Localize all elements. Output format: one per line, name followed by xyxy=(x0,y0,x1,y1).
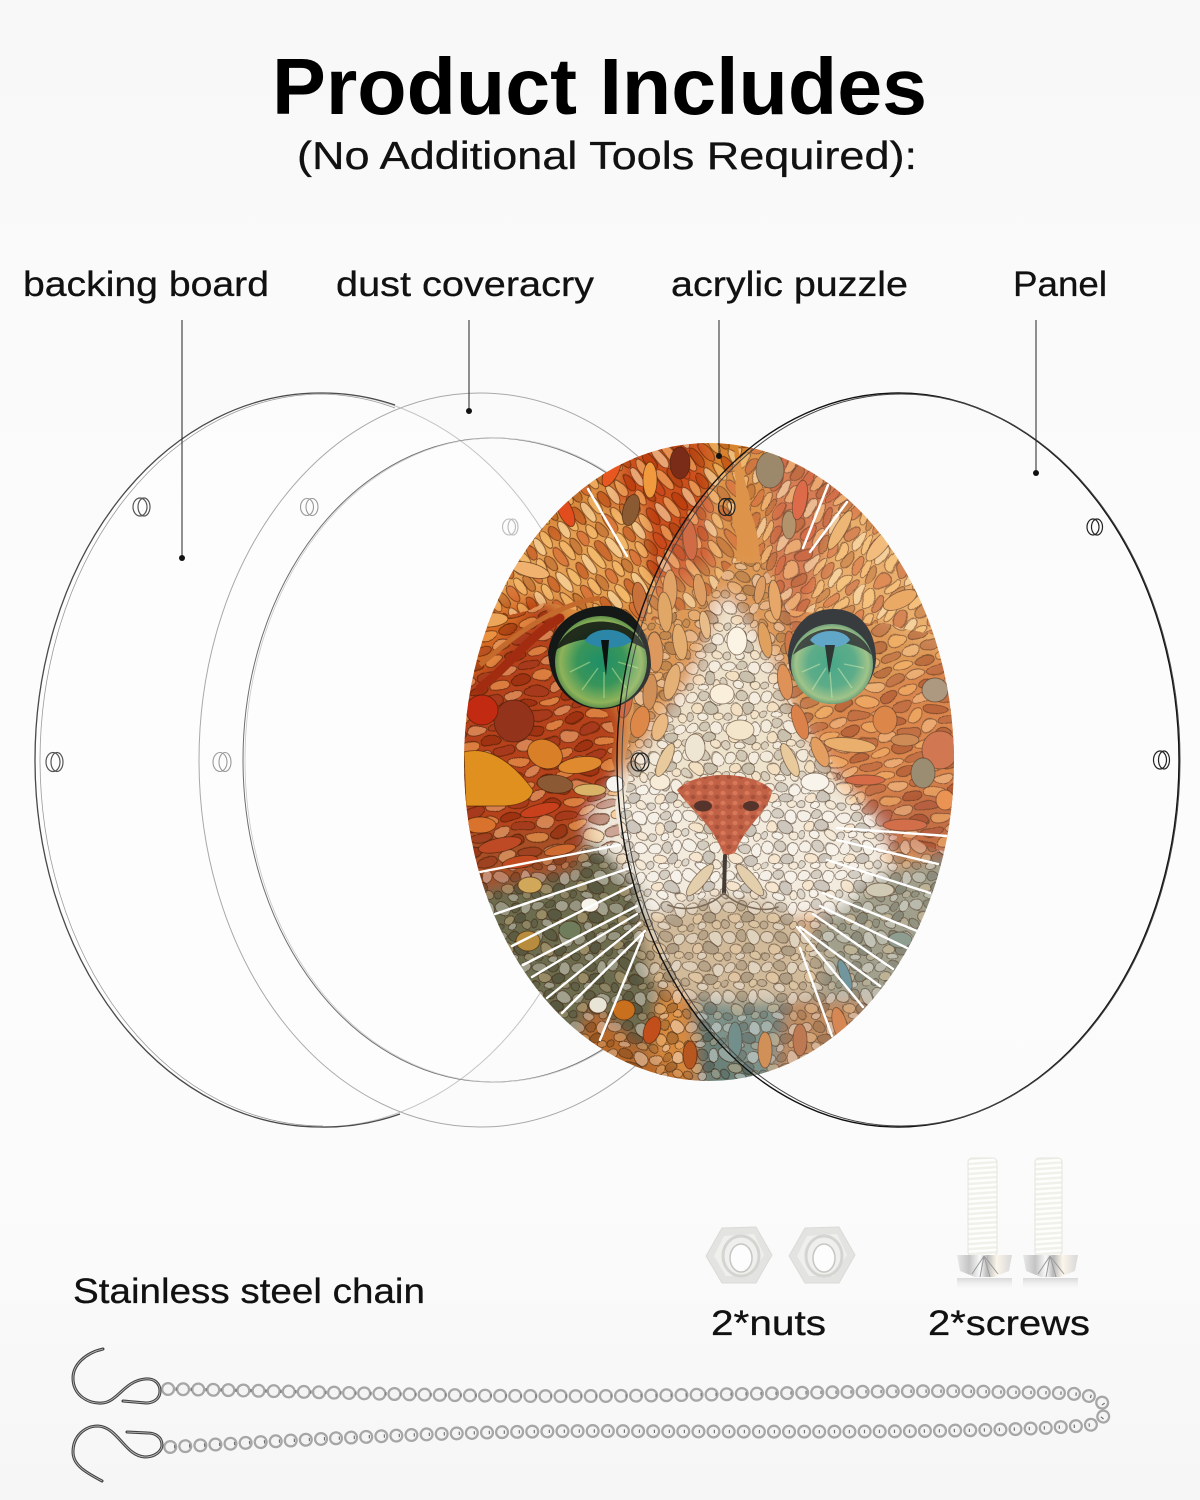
label: backing board: backing board xyxy=(23,265,269,304)
screws xyxy=(957,1158,1078,1289)
label: Panel: Panel xyxy=(1013,265,1107,304)
leader: acrylic puzzle xyxy=(716,320,722,459)
left eye xyxy=(548,606,651,709)
leader: dust cover xyxy=(466,320,472,414)
hook: upper xyxy=(73,1349,160,1403)
label: 2*nuts: 2*nuts xyxy=(711,1304,826,1343)
leader: panel xyxy=(1033,320,1039,476)
dust cover holes xyxy=(213,498,518,772)
chain xyxy=(73,1349,1105,1481)
mouth xyxy=(668,856,778,909)
acrylic puzzle: cat mosaic xyxy=(464,443,954,1081)
label: acrylic puzzle: acrylic puzzle xyxy=(671,265,908,304)
label: dust coveracry: dust coveracry xyxy=(336,265,595,304)
title: Product Includes xyxy=(272,42,927,131)
backing board holes xyxy=(46,498,150,772)
screw 1 xyxy=(957,1158,1012,1289)
leader: backing board xyxy=(179,320,185,561)
dust cover ring xyxy=(199,393,761,1127)
right eye xyxy=(788,609,876,704)
large pebbles xyxy=(464,447,958,1069)
chain links xyxy=(168,1389,1105,1447)
label: 2*screws: 2*screws xyxy=(928,1304,1090,1343)
subtitle: (No Additional Tools Required): xyxy=(297,135,917,178)
hook: lower xyxy=(73,1426,162,1481)
whiskers xyxy=(480,485,947,1040)
dark brow stripes xyxy=(480,618,560,688)
nuts xyxy=(706,1227,855,1283)
panel holes xyxy=(631,498,1170,771)
screw 2 xyxy=(1023,1158,1078,1289)
base colour regions xyxy=(464,443,954,1081)
nose xyxy=(677,775,772,856)
nut 2 xyxy=(789,1227,855,1283)
label: stainless steel chain: Stainless steel chain xyxy=(73,1272,425,1311)
nut 1 xyxy=(706,1227,772,1283)
pebble texture overlays xyxy=(464,443,954,1081)
backing board disc xyxy=(35,393,605,1127)
front panel disc xyxy=(617,393,1180,1127)
